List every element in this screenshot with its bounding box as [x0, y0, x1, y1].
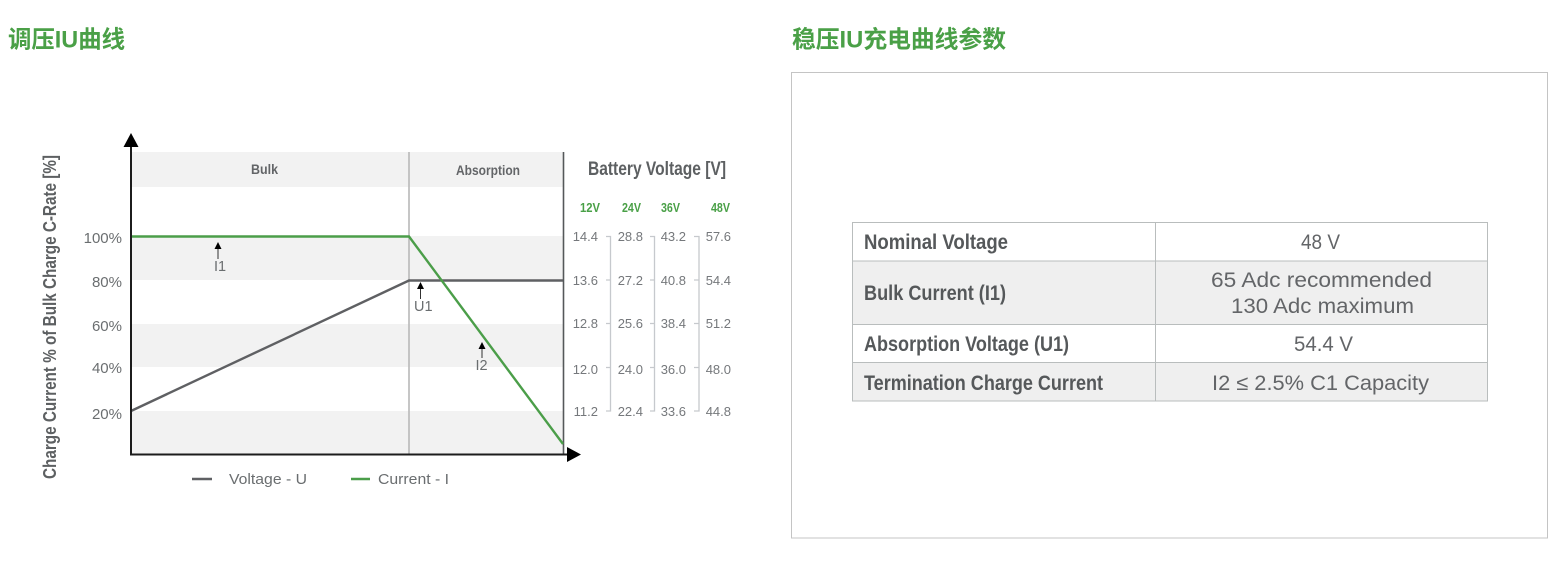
title: right table heading: 稳压IU充电曲线参数 [792, 26, 1006, 54]
right boundary line [562, 152, 564, 454]
row: bulk current: 130 Adc maximum [1231, 294, 1414, 318]
voltage scale values: 54.4 [706, 273, 731, 288]
y axis tick labels: 100% [84, 230, 122, 247]
voltage scale values: 28.8 [618, 229, 643, 244]
phase label: Bulk: Bulk [251, 161, 278, 177]
x axis arrow [130, 447, 581, 462]
legend [192, 472, 449, 488]
shaded rows [852, 261, 1487, 401]
voltage scale values: 24.0 [618, 362, 643, 377]
voltage scale values: 12.8 [573, 316, 598, 331]
legend: Voltage - U [229, 472, 307, 488]
voltage scale values [573, 229, 731, 419]
chart background bands [132, 152, 563, 454]
marker: U1: U1 [414, 299, 433, 315]
phase label: Absorption: Absorption [456, 162, 520, 178]
voltage scale values: 48.0 [706, 362, 731, 377]
y axis arrow [124, 133, 138, 455]
voltage scale values: 13.6 [573, 273, 598, 288]
y axis tick labels [84, 230, 122, 423]
row: termination charge current: Termination Charge Current [864, 372, 1103, 395]
marker: I2: I2 [476, 358, 488, 374]
row: termination charge current [864, 372, 1430, 395]
row: bulk current: Bulk Current (I1) [864, 282, 1006, 305]
battery voltage column headers [580, 200, 730, 215]
voltage scale values: 38.4 [661, 316, 686, 331]
voltage scale brackets [606, 236, 699, 411]
voltage scale values: 33.6 [661, 404, 686, 419]
voltage scale values: 44.8 [706, 404, 731, 419]
voltage scale values: 27.2 [618, 273, 643, 288]
row: termination charge current: I2 ≤ 2.5% C1 Capacity [1212, 372, 1430, 395]
voltage scale values: 43.2 [661, 229, 686, 244]
row: bulk current [864, 268, 1432, 318]
voltage scale values: 36.0 [661, 362, 686, 377]
voltage scale values: 57.6 [706, 229, 731, 244]
y axis tick labels: 40% [92, 360, 122, 377]
parameter table [852, 222, 1488, 401]
marker: I2 [476, 342, 488, 374]
row: nominal voltage [864, 231, 1340, 254]
voltage scale values: 40.8 [661, 273, 686, 288]
battery voltage column headers: 48V [711, 200, 730, 215]
row: absorption voltage: 54.4 V [1294, 333, 1353, 356]
y axis tick labels: 20% [92, 406, 122, 423]
y axis title: Charge Current % of Bulk Charge C-Rate [%] [40, 155, 60, 479]
y axis tick labels: 60% [92, 318, 122, 335]
panel: IU charge curve chart [40, 133, 731, 488]
panel: parameter table frame [792, 72, 1548, 538]
phase divider [408, 152, 410, 454]
voltage scale values: 14.4 [573, 229, 598, 244]
voltage scale values: 22.4 [618, 404, 643, 419]
voltage scale values: 51.2 [706, 316, 731, 331]
marker: I1 [214, 242, 226, 275]
y axis tick labels: 80% [92, 274, 122, 291]
current curve I [131, 236, 563, 444]
voltage curve U [131, 280, 563, 411]
battery voltage heading: Battery Voltage [V] [588, 159, 726, 180]
marker: U1 [414, 282, 433, 315]
legend: Current - I [378, 472, 449, 488]
marker: I1: I1 [214, 259, 226, 275]
row: absorption voltage [864, 333, 1353, 356]
voltage scale values: 12.0 [573, 362, 598, 377]
row: nominal voltage: 48 V [1301, 231, 1340, 254]
voltage scale values: 11.2 [574, 404, 598, 419]
row: nominal voltage: Nominal Voltage [864, 231, 1008, 254]
title: left chart heading: 调压IU曲线 [8, 26, 125, 54]
battery voltage column headers: 36V [661, 200, 680, 215]
battery voltage column headers: 24V [622, 200, 641, 215]
voltage scale values: 25.6 [618, 316, 643, 331]
battery voltage column headers: 12V [580, 200, 600, 215]
table grid [852, 222, 1488, 401]
row: absorption voltage: Absorption Voltage (U1) [864, 333, 1069, 356]
row: bulk current: 65 Adc recommended [1211, 268, 1432, 292]
